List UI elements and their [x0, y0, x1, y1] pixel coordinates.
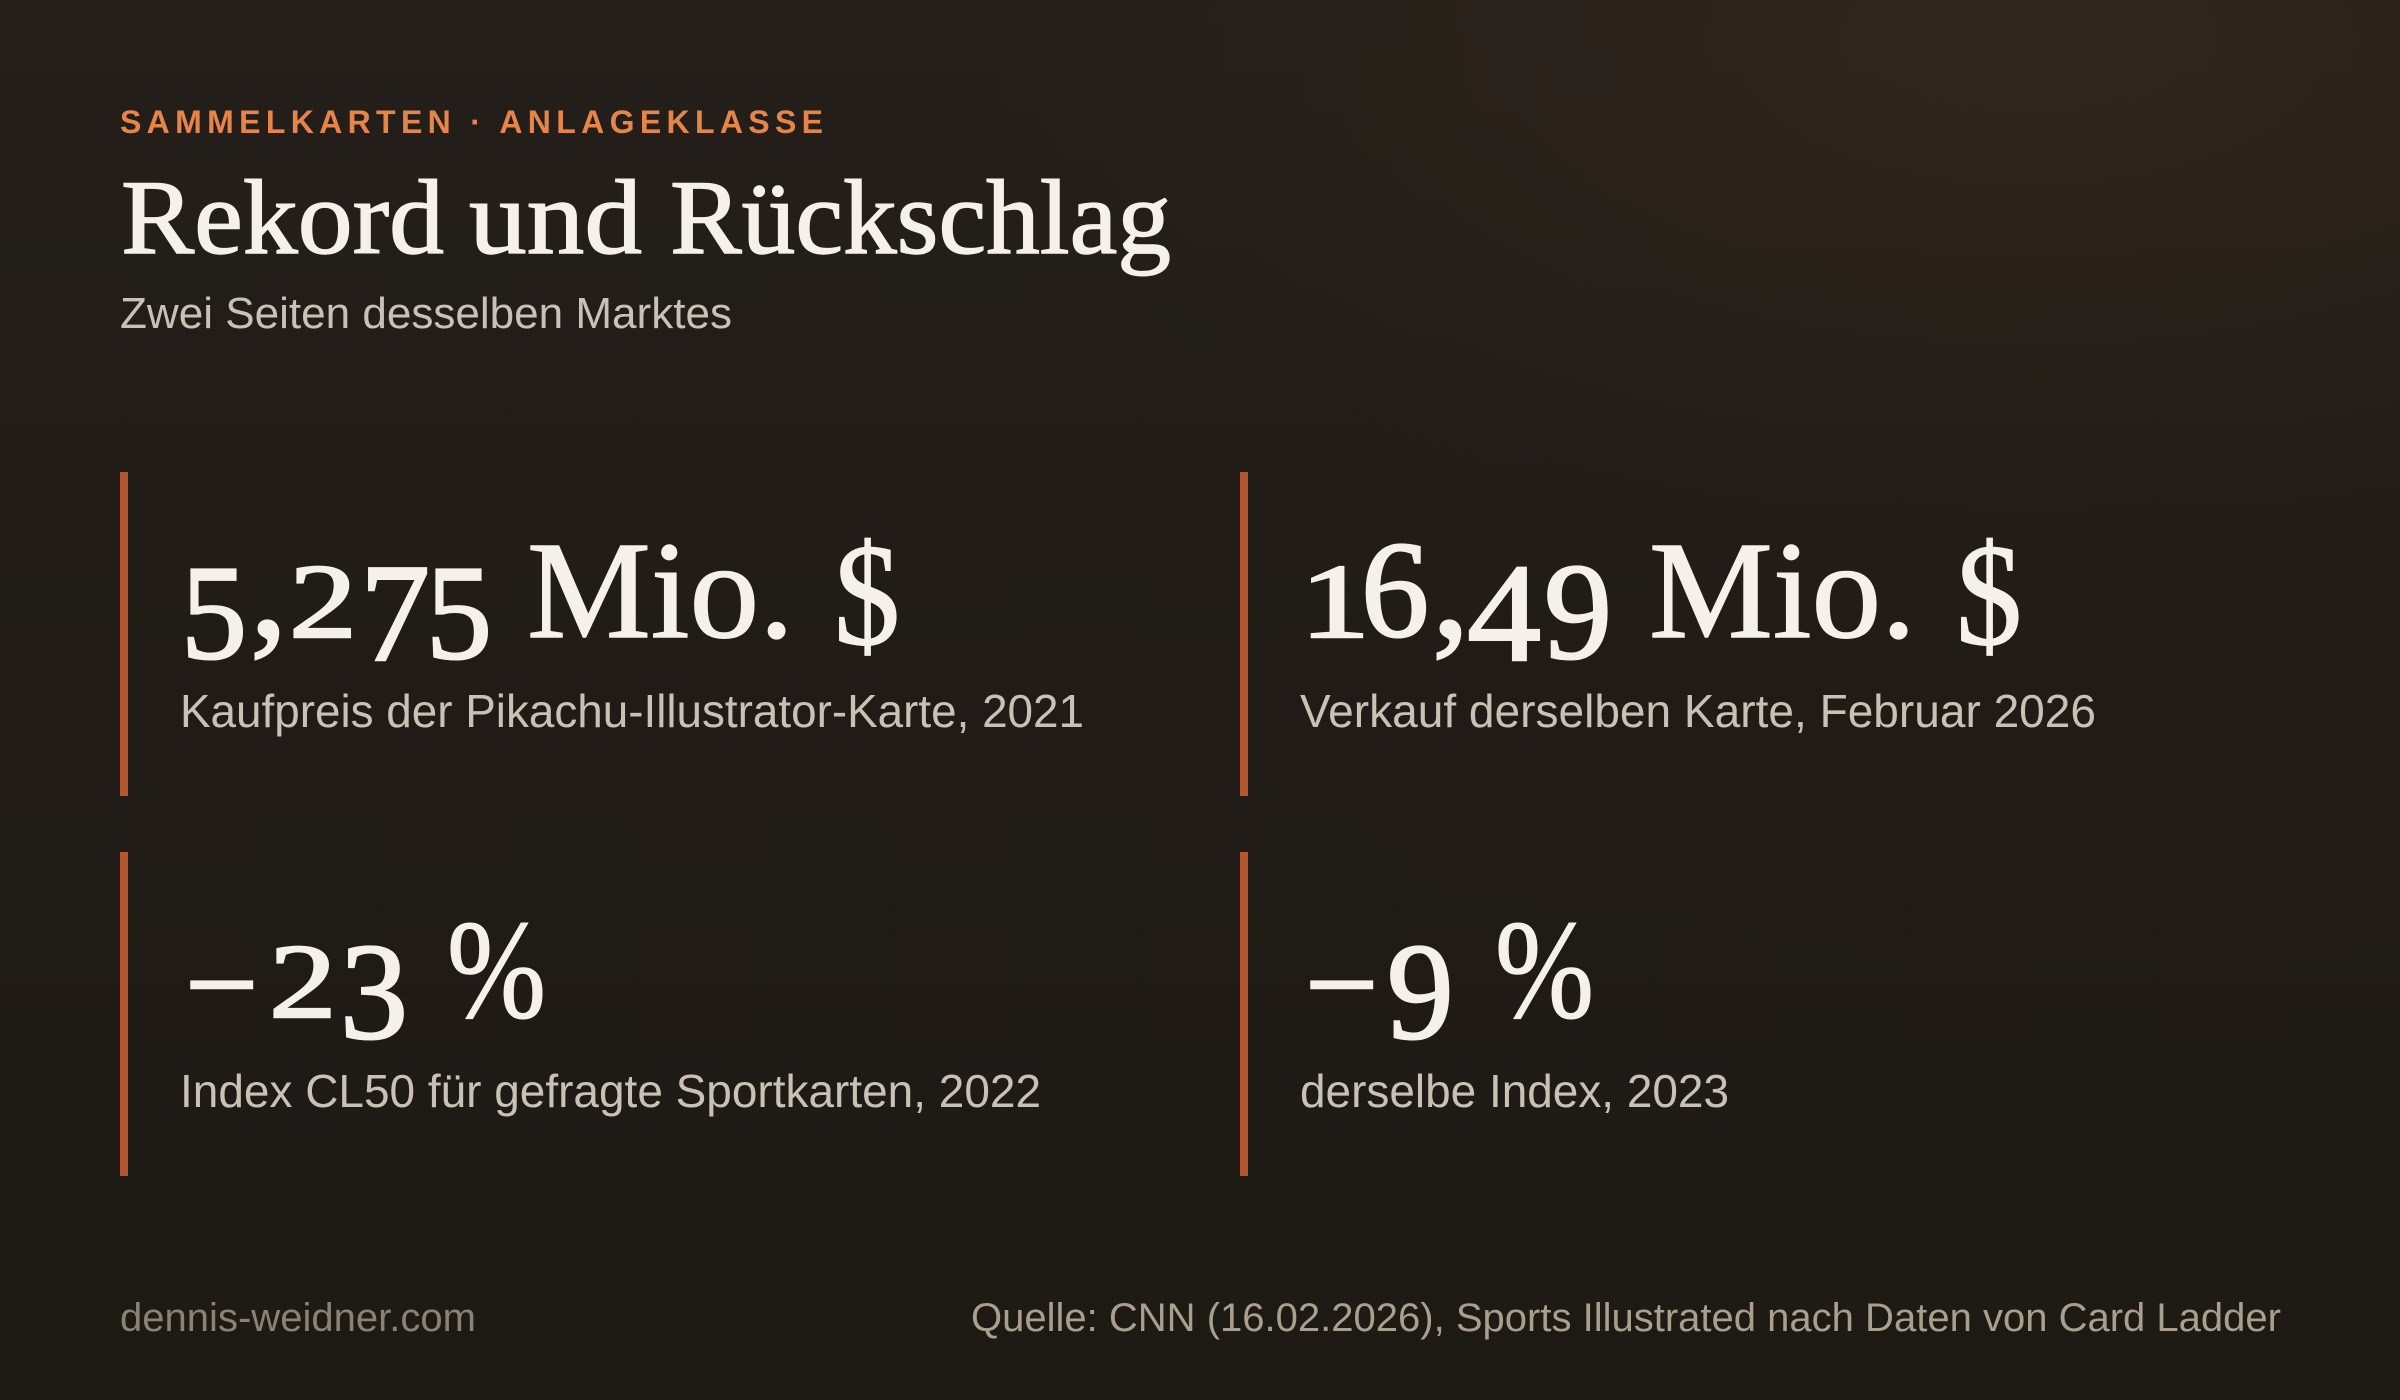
stat value: 4: [1467, 536, 1541, 691]
panel: stat 5,275 Mio. $: [120, 472, 1084, 796]
stat value: ,: [250, 503, 288, 669]
stat value: 1: [1300, 543, 1370, 660]
subtitle: Zwei Seiten desselben Marktes: [120, 289, 732, 338]
stat value: $: [1956, 514, 2022, 676]
stat label: Kaufpreis der Pikachu-Illustrator-Karte, 2021: [180, 685, 1084, 737]
eyebrow: SAMMELKARTEN · ANLAGEKLASSE: [120, 104, 823, 140]
accent bar: [120, 852, 128, 1176]
stat label: Index CL50 für gefragte Sportkarten, 2022: [180, 1065, 1041, 1117]
accent bar: [120, 472, 128, 796]
stat value: −: [185, 913, 258, 1057]
footer: source: Quelle: CNN (16.02.2026), Sports Illustrated nach Daten von Card Ladder: [971, 1296, 2281, 1340]
stat value: −: [1305, 913, 1378, 1057]
stat value: ,: [1432, 503, 1470, 669]
stat value: 3: [340, 915, 408, 1068]
stat value: %: [1495, 892, 1594, 1048]
title: Rekord: [121, 159, 444, 276]
panel: stat 16,49 Mio. $: [1240, 472, 2096, 796]
stat value: 9: [1544, 535, 1612, 688]
stat value: 2: [289, 543, 357, 660]
stat value: 2: [269, 923, 337, 1040]
accent bar: [1240, 472, 1248, 796]
stat value: 9: [1387, 915, 1454, 1068]
stat value: 6: [1361, 513, 1429, 666]
panel: stat −23 %: [120, 852, 1041, 1176]
accent bar: [1240, 852, 1248, 1176]
stat label: derselbe Index, 2023: [1300, 1065, 1729, 1117]
stat value: 5: [426, 539, 492, 688]
stat value: 7: [360, 536, 430, 691]
stat value: $: [834, 514, 900, 676]
title: Rückschlag: [670, 159, 1171, 276]
stat value: Mio.: [1649, 514, 1916, 668]
stat value: Mio.: [527, 514, 794, 668]
footer: site: dennis-weidner.com: [120, 1296, 476, 1340]
stat value: 5: [181, 539, 247, 688]
stat label: Verkauf derselben Karte, Februar 2026: [1300, 685, 2096, 737]
title: und: [469, 159, 642, 276]
stat value: %: [447, 892, 546, 1048]
panel: stat −9 %: [1240, 852, 1729, 1176]
